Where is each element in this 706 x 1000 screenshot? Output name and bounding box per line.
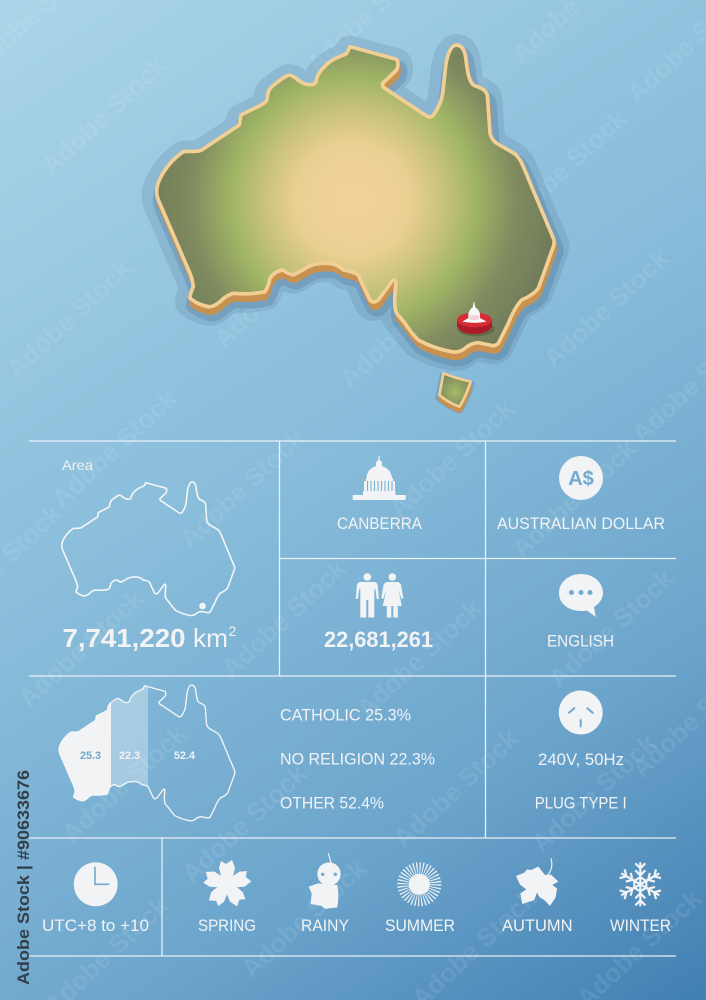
watermark pattern: Adobe Stock: [506, 433, 643, 564]
panel: time zone: [42, 862, 149, 935]
capital name: CANBERRA: [337, 514, 423, 533]
watermark pattern: Adobe Stock: [36, 50, 173, 181]
icon: man and woman: [356, 573, 403, 618]
religion map: 22.3: [119, 750, 140, 762]
area outline map: [62, 482, 235, 616]
area label: Area: [62, 457, 93, 473]
panel: language: [547, 574, 614, 650]
panel: population: [324, 573, 433, 652]
icon: autumn leaf: [516, 858, 558, 906]
watermark pattern: Adobe Stock: [496, 103, 633, 234]
autumn label: AUTUMN: [502, 916, 572, 935]
watermark pattern: Adobe Stock: [216, 553, 353, 684]
rainy label: RAINY: [301, 916, 349, 935]
religion map: 52.4: [174, 750, 196, 762]
watermark pattern: Adobe Stock: [236, 853, 373, 984]
capital pin: [457, 301, 495, 336]
spring label: SPRING: [198, 916, 256, 935]
religion map: [58, 684, 236, 822]
area value: 7,741,220: [62, 623, 186, 653]
watermark pattern: Adobe Stock: [543, 563, 680, 694]
icon: clock: [74, 862, 118, 906]
watermark pattern: Adobe Stock: [363, 63, 500, 194]
panel: capital: [337, 456, 423, 533]
watermark pattern: Adobe Stock: [46, 383, 183, 514]
panel: area: [62, 457, 237, 653]
icon: rainy teru teru bozu: [309, 853, 341, 909]
Tasmania: [439, 373, 471, 407]
icon: plug socket: [559, 690, 603, 734]
icon: speech bubble: [559, 574, 603, 617]
icon: currency coin: [559, 456, 603, 500]
watermark pattern: Adobe Stock: [334, 263, 471, 394]
watermark pattern: Adobe Stock: [176, 758, 313, 889]
watermark pattern: Adobe Stock: [56, 718, 193, 849]
watermark pattern: Adobe Stock: [538, 243, 675, 374]
panel: currency: [497, 456, 665, 533]
panel: electricity: [535, 690, 627, 812]
icon: currency coin: A$: [568, 468, 594, 490]
watermark pattern: Adobe Stock: [174, 423, 311, 554]
map extruded side: [158, 48, 555, 411]
watermark pattern: Adobe Stock: [384, 393, 521, 524]
winter label: WINTER: [610, 916, 671, 935]
panel: religion: [58, 684, 434, 822]
watermark pattern: Adobe Stock: [1, 253, 138, 384]
watermark pattern: Adobe Stock: [351, 593, 488, 724]
grid lines: [29, 441, 676, 956]
language name: ENGLISH: [547, 632, 614, 650]
currency name: AUSTRALIAN DOLLAR: [497, 514, 665, 533]
watermark pattern: Adobe Stock: [208, 223, 345, 354]
watermark pattern: Adobe Stock: [161, 93, 298, 224]
plug type: PLUG TYPE I: [535, 794, 627, 812]
time zone label: UTC+8 to +10: [42, 916, 149, 935]
icon: spring blossom: [202, 860, 252, 908]
icon: summer sun: [404, 869, 434, 899]
panel: seasons: [198, 853, 671, 935]
area unit: km: [193, 623, 228, 653]
religion legend: OTHER 52.4%: [280, 794, 384, 812]
map shadow: [157, 49, 557, 409]
religion legend: [280, 706, 435, 812]
religion legend: NO RELIGION 22.3%: [280, 750, 435, 768]
main map of Australia: [157, 45, 557, 411]
summer label: SUMMER: [385, 916, 455, 935]
voltage: 240V, 50Hz: [538, 750, 624, 769]
capital dot: [199, 603, 206, 609]
watermark pattern: Adobe Stock: [526, 728, 663, 859]
religion map: 25.3: [80, 750, 101, 762]
stock credit: Adobe Stock | #90633676: [14, 770, 33, 985]
religion legend: CATHOLIC 25.3%: [280, 706, 411, 724]
watermark pattern: Adobe Stock: [388, 723, 525, 854]
superscript: 2: [228, 623, 236, 639]
watermark pattern: Adobe Stock: [13, 583, 150, 714]
icon: winter snowflake: [620, 862, 661, 906]
map land surface: [157, 45, 554, 352]
population value: 22,681,261: [324, 627, 433, 652]
icon: capitol building: [353, 456, 406, 500]
